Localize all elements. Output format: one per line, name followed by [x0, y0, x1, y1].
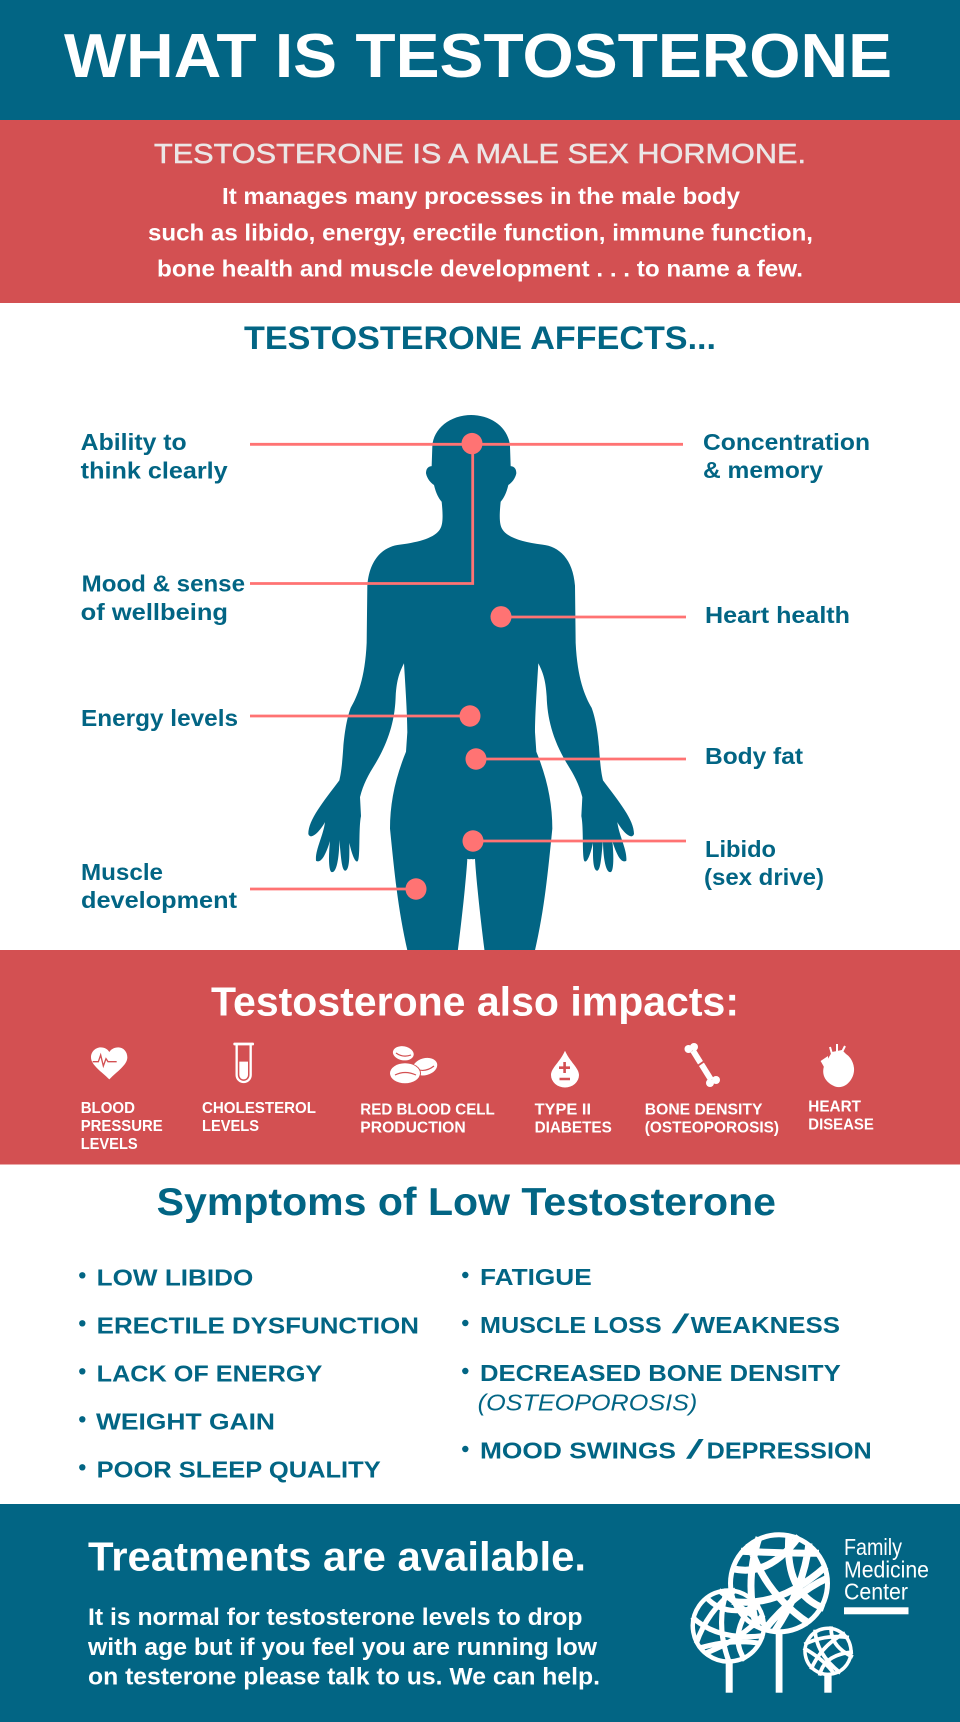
symptoms list: left column: ERECTILE DYSFUNCTION: [97, 1313, 419, 1339]
label: mood and wellbeing: of wellbeing: [81, 599, 228, 625]
label: bone density: BONE DENSITY: [645, 1101, 763, 1118]
panel: title header: [0, 0, 960, 120]
footer text: [87, 1604, 600, 1690]
label: blood pressure levels: PRESSURE: [81, 1118, 163, 1135]
panel: definition: [0, 120, 960, 303]
callout dots: [406, 433, 512, 900]
label: bone density: (OSTEOPOROSIS): [645, 1119, 779, 1136]
label: libido: (sex drive): [704, 864, 824, 890]
definition text: [148, 183, 813, 282]
label: libido: Libido: [705, 836, 776, 862]
icon: large tree: [730, 1534, 828, 1632]
symptoms list: right column: FATIGUE: [480, 1264, 592, 1290]
label: ability to think clearly: Ability to: [81, 429, 187, 455]
definition text: It manages many processes in the male body: [222, 183, 740, 209]
symptoms list: right column: MUSCLE LOSS: [480, 1312, 662, 1338]
definition text: bone health and muscle development . . . to name a few.: [157, 256, 803, 282]
icon: heart with pulse: [91, 1047, 127, 1079]
label: red blood cell production: PRODUCTION: [360, 1119, 466, 1136]
symptoms list: right column: /: [686, 1434, 704, 1464]
symptoms list: right column: DECREASED BONE DENSITY: [480, 1360, 841, 1386]
label: cholesterol levels: LEVELS: [202, 1118, 259, 1135]
heading: testosterone affects: TESTOSTERONE AFFECTS...: [244, 320, 716, 356]
icon: anatomical heart: [821, 1044, 854, 1087]
label: body fat: Body fat: [705, 743, 803, 769]
footer text: on testerone please talk to us. We can help.: [88, 1663, 600, 1690]
symptoms list: right column: /: [672, 1309, 690, 1339]
title: WHAT IS TESTOSTERONE: [64, 22, 892, 91]
label: type II diabetes: TYPE II: [535, 1101, 591, 1118]
footer text: with age but if you feel you are running low: [87, 1634, 597, 1661]
label: ability to think clearly: think clearly: [81, 457, 228, 483]
definition text: such as libido, energy, erectile function, immune function,: [148, 220, 813, 246]
symptoms list: left column: [79, 1265, 419, 1483]
label: heart disease: HEART: [808, 1099, 862, 1116]
label: blood pressure levels: [81, 1100, 163, 1153]
symptoms list: left column: LACK OF ENERGY: [97, 1361, 323, 1387]
body diagram: [250, 415, 686, 952]
label: concentration and memory: & memory: [703, 457, 823, 483]
logo wordmark: Family: [844, 1534, 902, 1560]
footer text: It is normal for testosterone levels to drop: [88, 1604, 582, 1631]
label: muscle development: development: [81, 887, 237, 913]
label: red blood cell production: [360, 1101, 495, 1136]
heading: symptoms of low testosterone: Symptoms of Low Testosterone: [157, 1181, 776, 1224]
symptoms list: left column: LOW LIBIDO: [97, 1265, 253, 1291]
icon: red blood cells: [389, 1045, 439, 1084]
label: libido: [704, 836, 824, 890]
icon: tree trunks: [726, 1630, 832, 1693]
panel: treatments footer: [0, 1504, 960, 1722]
label: muscle development: Muscle: [81, 859, 163, 885]
label: mood and wellbeing: [81, 571, 245, 625]
label: heart disease: [808, 1099, 874, 1134]
definition heading: TESTOSTERONE IS A MALE SEX HORMONE.: [154, 138, 806, 169]
icon: glucose drop: [551, 1051, 579, 1088]
logo wordmark: Medicine: [844, 1556, 929, 1582]
symptoms list: right column: DEPRESSION: [707, 1437, 872, 1463]
label: cholesterol levels: CHOLESTEROL: [202, 1100, 316, 1117]
symptoms list: left column: WEIGHT GAIN: [96, 1409, 275, 1435]
symptoms list: left column: POOR SLEEP QUALITY: [97, 1457, 381, 1483]
body silhouette: [308, 415, 634, 952]
panel: testosterone also impacts: [0, 950, 960, 1164]
label: heart health: Heart health: [705, 602, 850, 628]
label: blood pressure levels: LEVELS: [81, 1136, 138, 1153]
symptoms list: right column: [462, 1264, 872, 1464]
footer heading: Treatments are available.: [88, 1534, 586, 1580]
label: type II diabetes: DIABETES: [535, 1119, 612, 1136]
icon: left tree: [678, 1576, 778, 1676]
label: heart disease: DISEASE: [808, 1117, 874, 1134]
callout lines: [250, 444, 686, 889]
logo: family medicine center: [678, 1534, 929, 1693]
symptoms list: right column: (OSTEOPOROSIS): [478, 1390, 697, 1416]
symptoms list: right column: WEAKNESS: [691, 1312, 840, 1338]
logo wordmark: [844, 1534, 929, 1614]
impacts heading: Testosterone also impacts:: [211, 978, 739, 1024]
label: blood pressure levels: BLOOD: [81, 1100, 135, 1117]
label: muscle development: [81, 859, 237, 913]
label: mood and wellbeing: Mood & sense: [82, 571, 245, 597]
icon: test tube: [233, 1043, 254, 1082]
label: energy levels: Energy levels: [81, 705, 238, 731]
label: type II diabetes: [535, 1101, 612, 1136]
label: ability to think clearly: [81, 429, 228, 483]
label: concentration and memory: Concentration: [703, 429, 870, 455]
icon: bone: [684, 1043, 720, 1087]
label: red blood cell production: RED BLOOD CELL: [360, 1101, 495, 1118]
logo wordmark: Center: [844, 1578, 908, 1604]
label: concentration and memory: [703, 429, 870, 483]
label: cholesterol levels: [202, 1100, 316, 1135]
symptoms list: right column: MOOD SWINGS: [480, 1437, 676, 1463]
label: bone density: [645, 1101, 779, 1136]
icon: small tree: [801, 1623, 856, 1679]
